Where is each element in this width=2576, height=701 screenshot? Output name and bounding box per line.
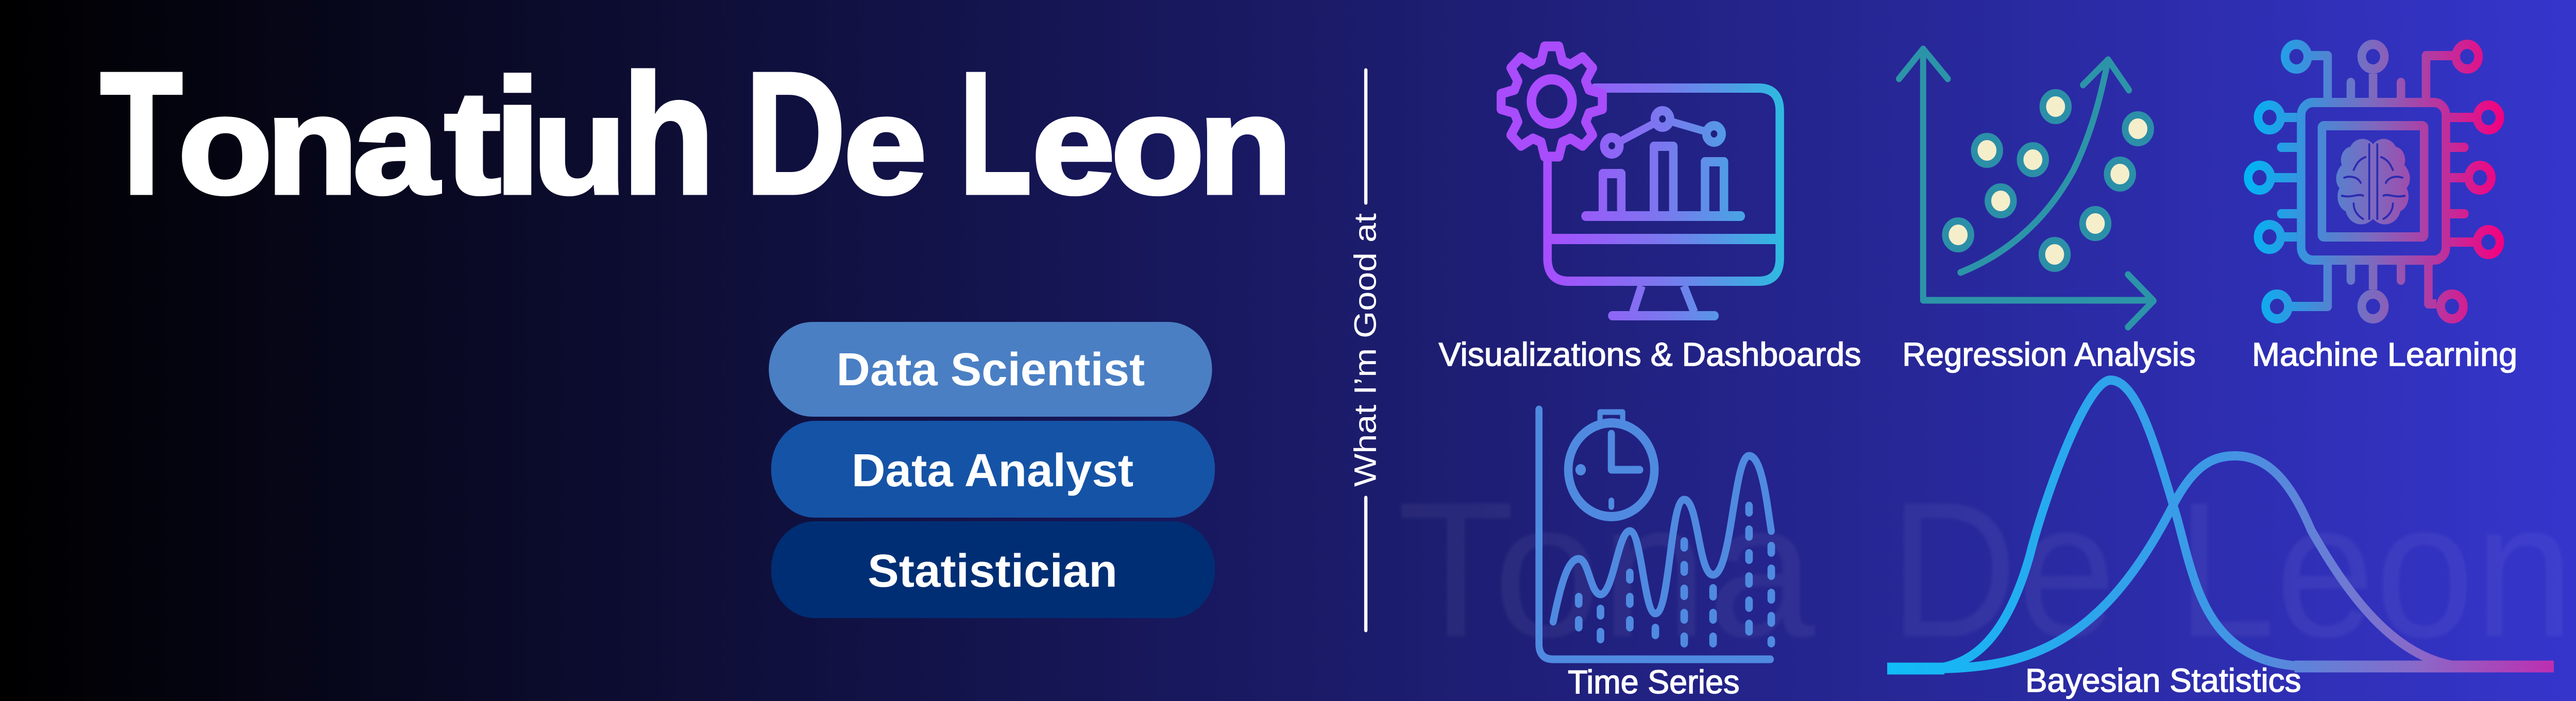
role pill: Data Analyst: Data Analyst: [852, 445, 1133, 497]
role pill: Statistician: Statistician: [868, 545, 1117, 597]
title: o: [178, 67, 273, 223]
role pill: Statistician: [771, 521, 1215, 618]
watermark name: [1397, 463, 2573, 677]
watermark name: De: [1890, 463, 2116, 677]
icon: time series chart with clock: [1539, 409, 1771, 659]
title: T: [100, 36, 182, 230]
icon: regression scatter plot: [1899, 49, 2154, 327]
label: Regression Analysis: Regression Analysis: [1902, 336, 2196, 373]
title: n: [266, 67, 358, 223]
title: h: [622, 40, 715, 230]
title: t: [444, 60, 501, 224]
title: a: [353, 67, 440, 223]
title: D: [745, 36, 846, 230]
title: n: [1198, 67, 1293, 223]
role pill: Data Scientist: [769, 322, 1212, 417]
label: Time Series: Time Series: [1568, 664, 1739, 701]
icon: AI chip with brain: [2248, 44, 2500, 319]
title: u: [532, 67, 627, 223]
title: o: [1111, 67, 1205, 223]
label: Visualizations & Dashboards: Visualizations & Dashboards: [1438, 336, 1861, 373]
label: Bayesian Statistics: Bayesian Statistics: [2025, 662, 2301, 699]
watermark name: Leon: [2176, 463, 2573, 677]
vertical divider with heading: What I’m Good at: [1348, 213, 1383, 487]
title: e: [1032, 67, 1115, 223]
icon: brain: [2336, 139, 2410, 225]
role pill: Data Scientist: Data Scientist: [837, 344, 1145, 396]
role pill: Data Analyst: [771, 421, 1215, 518]
title: e: [843, 67, 927, 223]
title: i: [494, 45, 541, 228]
title: L: [959, 36, 1032, 230]
watermark name: Tona: [1397, 463, 1816, 677]
label: Machine Learning: Machine Learning: [2252, 336, 2517, 373]
icon: monitor dashboard with gear: [1501, 46, 1780, 316]
icon: Bayesian distribution curves: [1887, 380, 2554, 669]
